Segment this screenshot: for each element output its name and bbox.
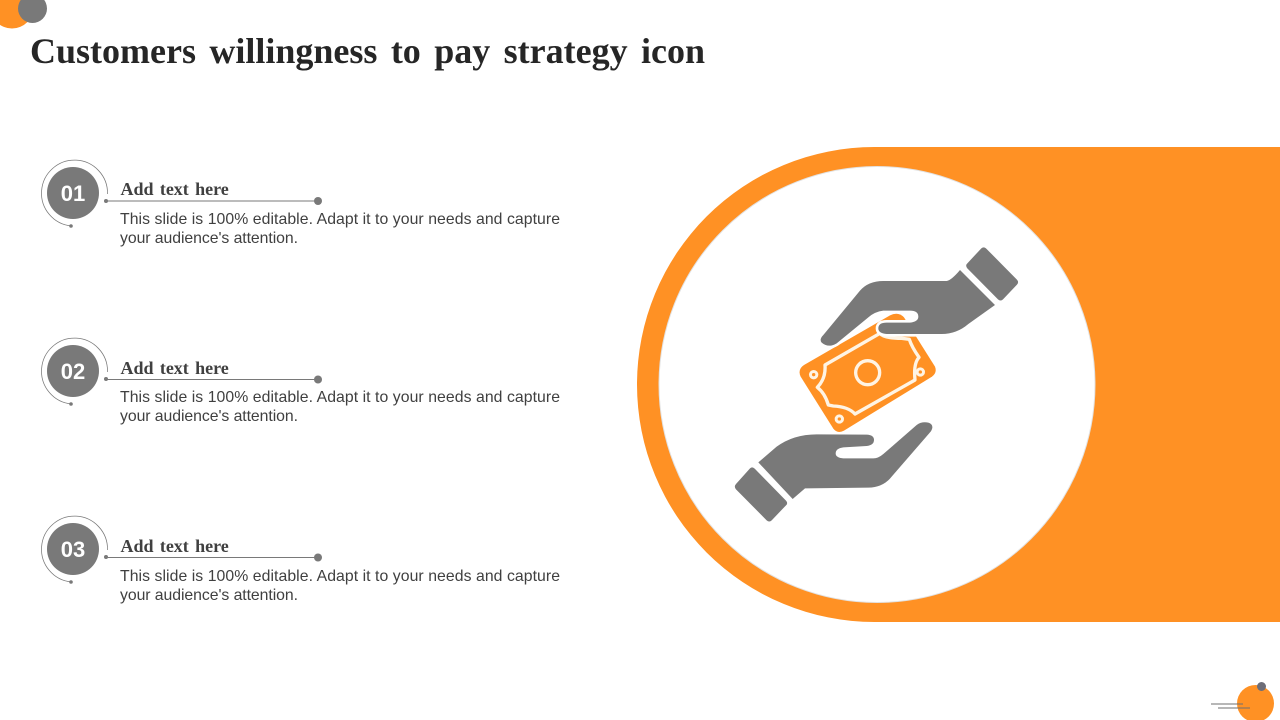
orange rounded banner xyxy=(637,147,1280,622)
decoration: top left circles xyxy=(0,0,47,28)
icon: banknote xyxy=(800,314,936,432)
body text 02: your audience's attention. xyxy=(120,408,298,425)
number badge 02: 02 xyxy=(61,359,85,384)
body text 02 xyxy=(120,389,560,425)
body text 03: your audience's attention. xyxy=(120,587,298,604)
decoration: bottom right circles and lines xyxy=(1211,682,1274,720)
connector line xyxy=(106,197,322,205)
body text 03 xyxy=(120,568,560,604)
list item 02 xyxy=(42,338,560,425)
number badge 02 xyxy=(42,338,108,406)
heading 02: Add text here xyxy=(120,358,229,378)
body text 02: This slide is 100% editable. Adapt it to your needs and capture xyxy=(120,389,560,406)
number badge 01: 01 xyxy=(61,181,85,206)
number badge 03: 03 xyxy=(61,537,85,562)
heading 01: Add text here xyxy=(120,179,229,199)
icon: lower hand xyxy=(735,422,932,521)
connector line xyxy=(106,554,322,562)
number badge 03 xyxy=(42,516,108,584)
white circle xyxy=(659,166,1095,602)
body text 01 xyxy=(120,211,560,247)
body text 01: This slide is 100% editable. Adapt it to your needs and capture xyxy=(120,211,560,228)
icon: upper hand xyxy=(821,247,1018,346)
body text 03: This slide is 100% editable. Adapt it to your needs and capture xyxy=(120,568,560,585)
list item 03 xyxy=(42,516,560,604)
list item 01 xyxy=(42,160,560,247)
icon: hands exchanging money xyxy=(735,247,1018,521)
body text 01: your audience's attention. xyxy=(120,230,298,247)
number badge 01 xyxy=(42,160,108,228)
heading 03: Add text here xyxy=(120,536,229,556)
connector line xyxy=(106,376,322,384)
title: Customers willingness to pay strategy icon xyxy=(30,31,705,71)
